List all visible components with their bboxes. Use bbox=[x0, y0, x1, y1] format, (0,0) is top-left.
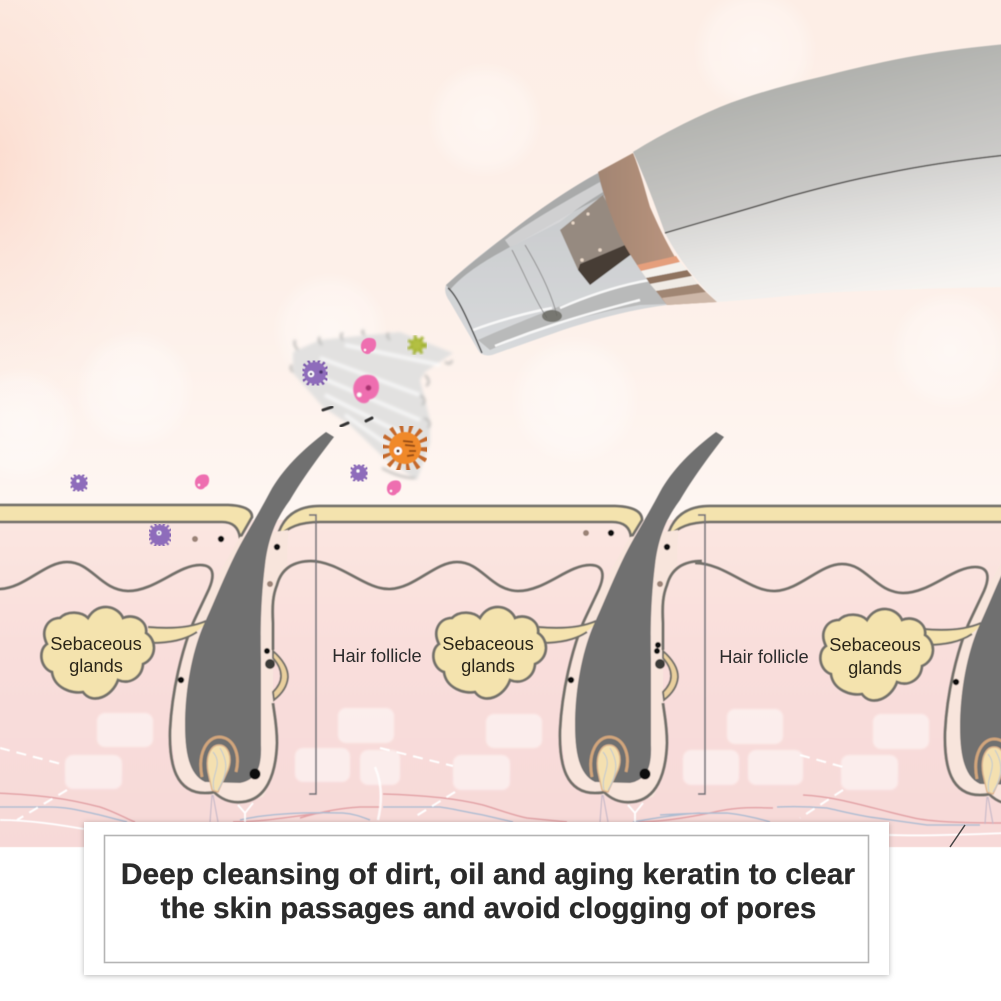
green germ bbox=[410, 338, 424, 352]
follicle bracket 2 bbox=[698, 515, 705, 794]
hair follicle 1 bbox=[0, 432, 334, 822]
white tissue cells bbox=[65, 708, 929, 790]
device body upper bbox=[633, 44, 1001, 233]
label: hair follicle 2: Hair follicle bbox=[719, 646, 809, 667]
sebaceous gland 3 bbox=[820, 609, 933, 700]
sebaceous gland 2 bbox=[433, 607, 546, 698]
pink germ small top bbox=[361, 338, 376, 354]
follicle bracket 1 bbox=[309, 515, 316, 794]
sebaceous gland 1: Sebaceous bbox=[50, 633, 142, 654]
debris swirl bbox=[72, 330, 453, 545]
debris flecks bbox=[323, 407, 372, 426]
purple germ lower bbox=[352, 466, 366, 480]
device bbox=[445, 44, 1001, 355]
purple germ in skin bbox=[150, 525, 170, 545]
vessels and nerve lines bbox=[0, 748, 1001, 835]
epidermis band bbox=[0, 505, 1001, 538]
purple germ left bbox=[72, 476, 86, 490]
sebaceous gland 1: glands bbox=[69, 655, 123, 676]
body seam bbox=[665, 155, 1001, 233]
hair edge line at lower right bbox=[950, 825, 965, 847]
label: hair follicle 1: Hair follicle bbox=[332, 645, 422, 666]
sebaceous gland 2: Sebaceous bbox=[442, 633, 534, 654]
pink germ left bbox=[195, 474, 209, 489]
rose gold ring bbox=[598, 153, 717, 305]
caption text: Deep cleansing of dirt, oil and aging keratin to clear bbox=[121, 858, 855, 891]
caption card bbox=[84, 822, 889, 975]
orange germ bbox=[385, 428, 425, 468]
dermis background bbox=[0, 520, 1001, 847]
loose debris dots bbox=[192, 530, 661, 648]
purple germ top bbox=[304, 362, 326, 384]
sebaceous gland 2: glands bbox=[461, 655, 515, 676]
sebaceous gland 1 bbox=[41, 607, 154, 698]
pink germ lower bbox=[387, 480, 401, 495]
inner metal core bbox=[560, 195, 633, 285]
pink germ large bbox=[353, 375, 379, 403]
caption card: the skin passages and avoid clogging of pores bbox=[161, 892, 816, 925]
hair follicle 2 bbox=[310, 432, 724, 822]
clear nozzle bbox=[445, 172, 667, 355]
sebaceous gland 3: glands bbox=[848, 657, 902, 678]
skin cross-section bbox=[0, 432, 1001, 847]
swirl cone bbox=[291, 330, 453, 480]
sebaceous gland 3: Sebaceous bbox=[829, 634, 921, 655]
device body lower bbox=[665, 155, 1001, 302]
hair follicle 3 bbox=[695, 434, 1001, 824]
